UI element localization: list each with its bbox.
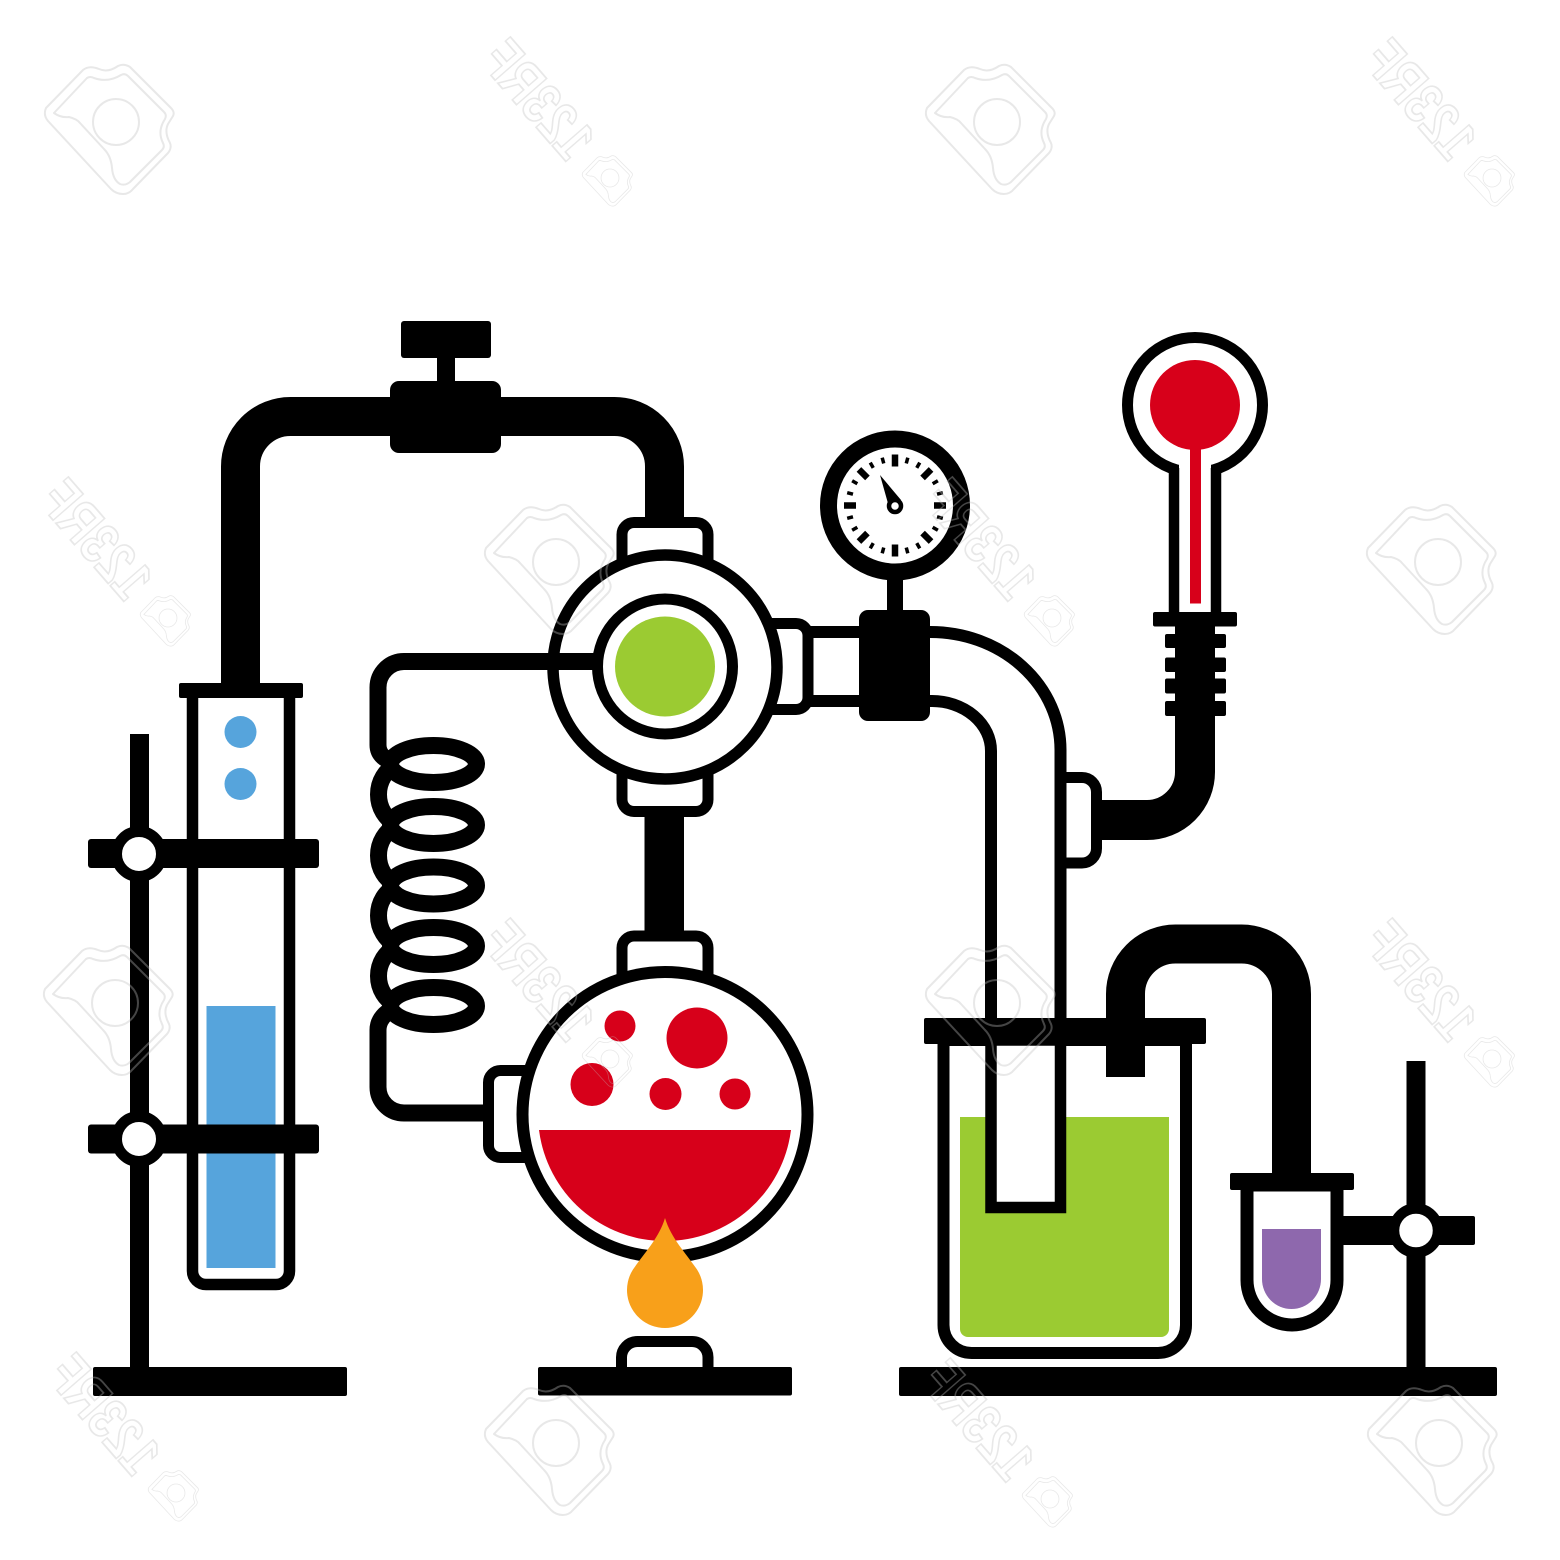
tube collar [179,683,303,698]
round-bottom flask with red liquid [488,936,808,1257]
valve stem [437,355,455,385]
gauge major ticks [844,454,946,556]
clamp arm [88,839,319,868]
stock watermark overlay: 123RF [909,1349,1047,1493]
purple liquid [1262,1229,1321,1309]
thermometer collar [1153,612,1237,626]
flame [627,1218,703,1328]
clamp ring [116,832,162,876]
coil return line [378,1006,495,1113]
gauge dial [828,439,962,572]
top pipe from test tube to junction [240,416,664,686]
stopcock valve [390,321,501,453]
right bench base [899,1367,1497,1396]
gauge stem [887,572,903,614]
burner cap [621,1342,708,1372]
bubble small top [604,1010,636,1042]
bottom connector [622,740,708,812]
pipe interior in liquid [991,1040,1060,1208]
burner base [538,1367,792,1396]
coil loop 5 [390,988,476,1024]
right retort stand with clamp [1335,1061,1475,1371]
stock watermark overlay: 123RF [27,468,165,612]
beaker with green liquid [924,1000,1206,1353]
red liquid [539,1130,791,1241]
red column [1190,445,1201,604]
clamp ring [116,1116,162,1162]
bubble middle [650,1078,682,1110]
flask side connector [488,1070,558,1158]
coil loop 2 [390,806,476,844]
thermometer rib 4 [1165,701,1226,716]
outer pipe wall [925,632,1060,1208]
left retort stand with clamps [93,734,347,1396]
coil back arcs [378,764,398,1006]
coil loop 3 [390,867,476,904]
inner pipe wall [925,701,991,1208]
thermometer [1128,338,1262,716]
top connector [622,522,708,592]
green liquid [960,1117,1169,1337]
U-shaped transfer hose [1126,944,1292,1178]
stock watermark overlay: 123RF [1351,28,1489,172]
blue bubble upper [224,716,256,748]
bubble large [666,1008,728,1068]
beaker lid [924,1018,1206,1044]
stem walls [1174,468,1216,615]
thermometer rib 1 [1165,634,1226,648]
red bulb [1150,360,1240,450]
outer sphere [553,555,777,779]
flask top connector [622,936,708,1006]
short horizontal section [810,632,865,701]
thermometer rib 3 [1165,678,1226,694]
beaker glass [944,1040,1186,1353]
bubble left [570,1063,614,1106]
flask body [522,972,808,1257]
valve body [390,381,501,453]
stock watermark overlay: 123RF [1351,909,1489,1053]
thermometer hose [1095,626,1195,820]
tube glass [1247,1185,1337,1325]
stem opening [1179,455,1211,615]
stock watermark overlay: 123RF [35,1343,173,1487]
pressure gauge [828,439,962,614]
upper clamp [88,832,319,876]
blue liquid [206,1006,276,1268]
wide pipe from junction down into beaker [810,610,1060,1208]
spiral coil [378,746,495,1113]
junction sphere with green window [378,522,808,812]
gauge hub [889,500,901,512]
thermometer rib 2 [1165,658,1226,672]
gauge minor ticks [847,458,943,553]
pipe walls above beaker [991,1000,1060,1040]
inner ring [598,599,732,734]
stand base [93,1367,347,1396]
green window [615,616,715,716]
vertical pipe between junction and flask [644,810,684,936]
small test tube with purple liquid [1230,1173,1354,1325]
coil loop 1 [390,746,476,782]
stock watermark overlay: 123RF [469,28,607,172]
burner [538,1218,792,1396]
stand rod [1406,1061,1426,1371]
right connector [740,624,808,710]
lower clamp [88,1116,319,1162]
connector valve block [859,610,930,721]
tube glass [192,690,290,1284]
thermometer bulb glass [1128,338,1262,472]
stock watermark overlay: 123RF [911,468,1049,612]
stand rod [130,734,149,1374]
stock watermark overlay: 123RF [469,909,607,1053]
blue bubble lower [224,768,256,800]
gauge needle [880,475,901,507]
clamp ring [1394,1208,1438,1252]
coil feed line [378,662,600,764]
coil loop 4 [390,928,476,964]
clamp arm [1335,1216,1475,1245]
bubble right [720,1078,750,1110]
side connector on wide pipe [1060,778,1096,863]
clamp arm [88,1124,319,1154]
tall test tube with blue liquid [179,683,303,1284]
tube collar [1230,1173,1354,1190]
valve handle [401,321,491,358]
